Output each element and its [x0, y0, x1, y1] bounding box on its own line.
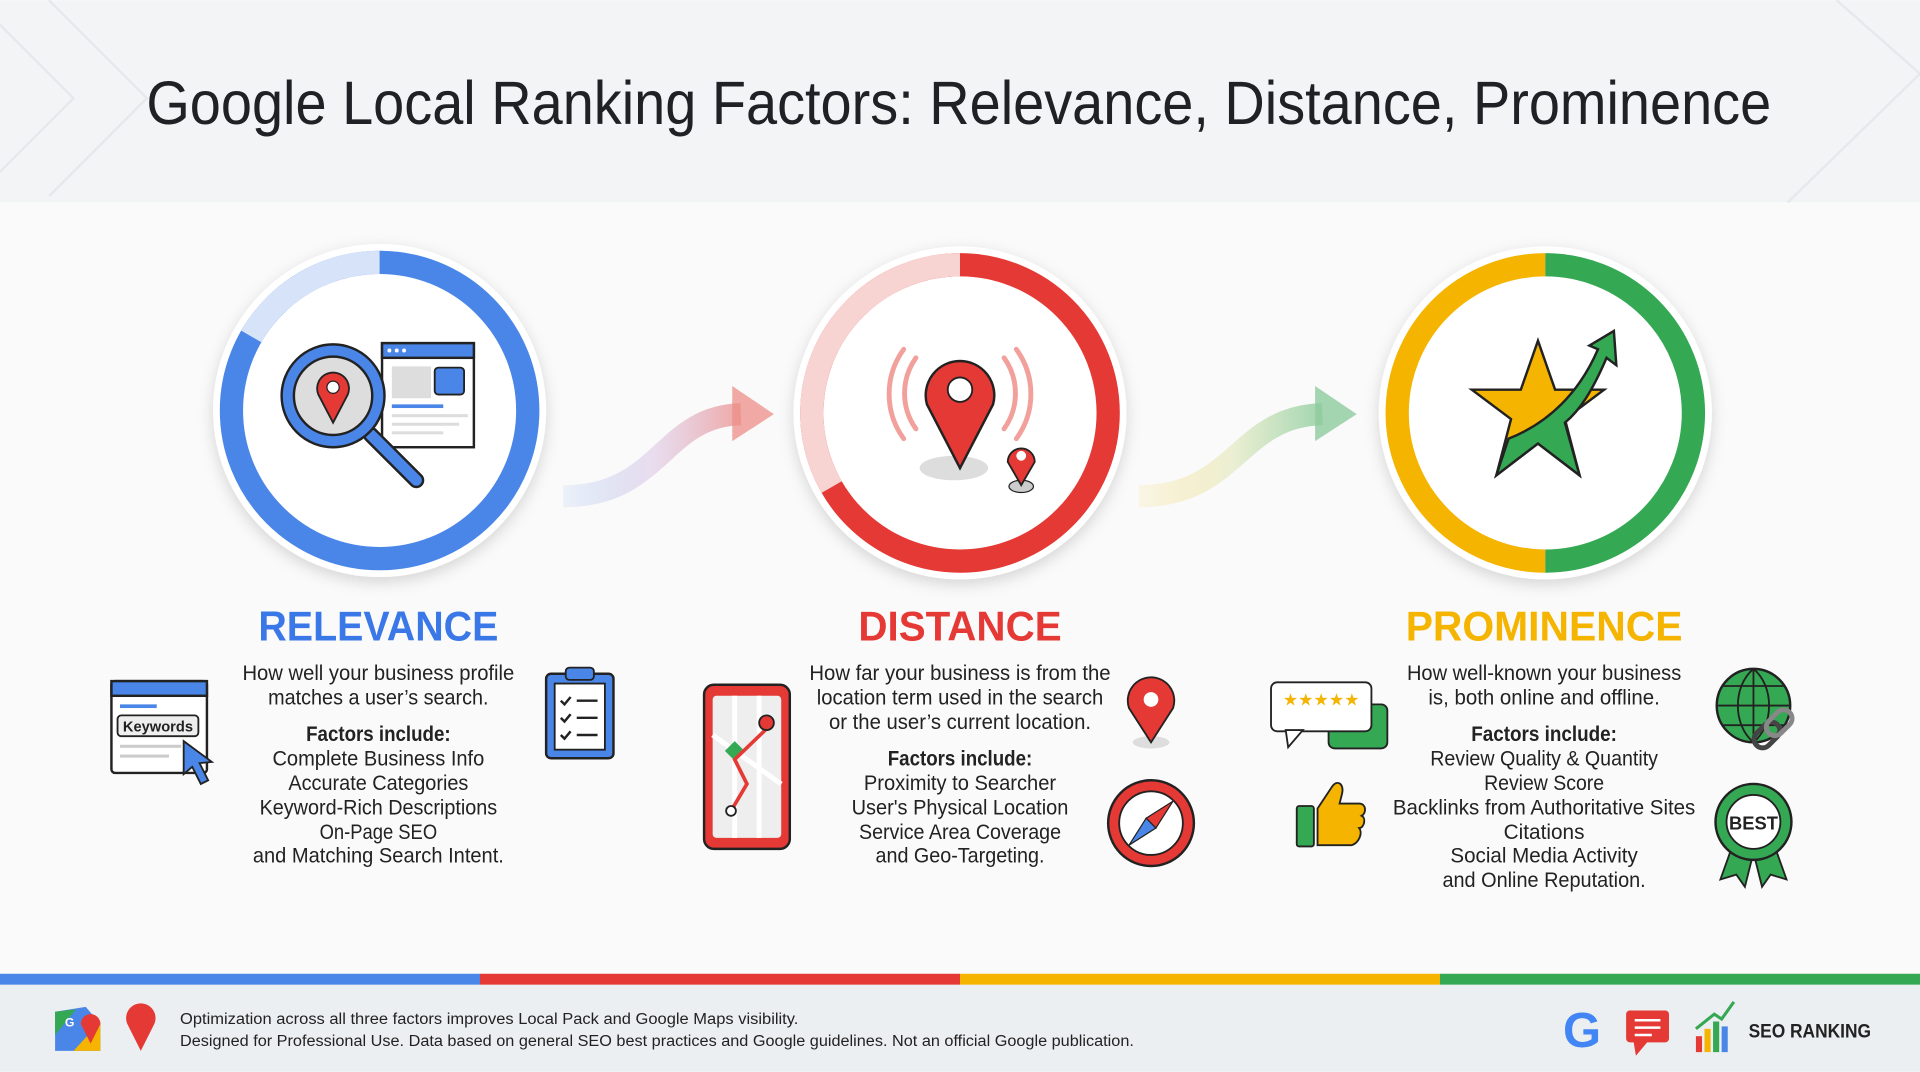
heading: prominence: PROMINENCE	[1406, 603, 1682, 650]
text: distance description: How far your business is from the	[809, 662, 1111, 685]
circle: prominence	[1379, 246, 1712, 579]
arrow: relevance to distance	[563, 386, 774, 496]
label: seo ranking: SEO RANKING	[1749, 1020, 1871, 1042]
text: prominence description: is, both online and offline.	[1428, 686, 1660, 709]
text: prominence description: Social Media Activity	[1450, 844, 1638, 867]
text: prominence description: Citations	[1504, 821, 1584, 844]
icon: phone map	[704, 685, 790, 849]
icon: footer pin	[126, 1003, 156, 1051]
icon: clipboard	[546, 668, 613, 758]
text: prominence description: Factors include:	[1471, 723, 1617, 746]
icon: google G: G	[1563, 1004, 1601, 1058]
icon: keywords browser: Keywords	[123, 719, 193, 735]
icon: maps: G	[65, 1015, 74, 1029]
text: prominence description: Review Score	[1484, 772, 1604, 795]
arrow: distance to prominence	[1139, 386, 1357, 496]
text: relevance description	[242, 662, 514, 867]
icon: best badge	[1716, 784, 1791, 887]
text: distance description: and Geo-Targeting.	[876, 844, 1044, 867]
text: prominence description: How well-known your business	[1407, 662, 1681, 685]
text: relevance description: How well your business profile	[242, 662, 514, 685]
panel: prominence	[1271, 246, 1796, 892]
heading: distance: DISTANCE	[858, 603, 1062, 650]
text: distance description: Proximity to Searcher	[864, 772, 1056, 795]
icon: star with growth arrow	[1472, 331, 1616, 475]
text: prominence description	[1393, 662, 1695, 892]
text: relevance description: Accurate Categories	[288, 772, 468, 795]
icon: best badge: BEST	[1729, 812, 1779, 833]
footer text	[180, 1011, 1134, 1050]
text: relevance description: Complete Business Info	[272, 748, 484, 771]
text: relevance description: On-Page SEO	[320, 821, 437, 844]
circle: relevance	[213, 244, 546, 577]
text: distance description: User's Physical Location	[852, 797, 1068, 820]
icon: thumbs up	[1297, 783, 1365, 846]
icon: review chat bubbles	[1271, 682, 1387, 748]
text: distance description: location term used in the search	[817, 686, 1103, 709]
text: relevance description: Factors include:	[306, 723, 451, 746]
icon: maps	[55, 1007, 100, 1051]
panel: relevance	[111, 244, 613, 867]
text: relevance description: and Matching Search Intent.	[253, 844, 504, 867]
text: prominence description: and Online Reputation.	[1442, 869, 1646, 892]
text: prominence description: Backlinks from Authoritative Sites	[1393, 797, 1695, 820]
text: distance description: Service Area Coverage	[859, 821, 1061, 844]
title: Google Local Ranking Factors: Relevance, Distance, Prominence	[146, 69, 1771, 137]
icon: pin	[1128, 677, 1174, 748]
heading: relevance: RELEVANCE	[258, 603, 498, 650]
text: prominence description: Review Quality & Quantity	[1430, 748, 1659, 771]
icon: globe with link	[1717, 669, 1796, 751]
icon: ranking chart	[1696, 1002, 1734, 1052]
text: distance description	[809, 662, 1111, 867]
text: distance description: Factors include:	[888, 748, 1032, 771]
icon: keywords browser	[111, 681, 212, 784]
header band	[0, 0, 1920, 202]
footer text: Designed for Professional Use. Data based on general SEO best practices and Google guidelines. Not an official Google publication.	[180, 1033, 1134, 1050]
panel: distance	[704, 246, 1194, 867]
circle: distance	[793, 246, 1127, 579]
icon: review chat bubbles: ★★★★★	[1283, 690, 1360, 710]
icon: magnifier with browser	[282, 343, 474, 480]
icon: compass	[1108, 780, 1194, 866]
text: relevance description: Keyword-Rich Descriptions	[260, 797, 497, 820]
text: distance description: or the user’s current location.	[829, 711, 1091, 734]
icon: location pin with signal	[889, 349, 1035, 493]
footer	[0, 985, 1920, 1072]
icon: chat	[1626, 1010, 1669, 1056]
footer text: Optimization across all three factors improves Local Pack and Google Maps visibility.	[180, 1011, 798, 1028]
text: relevance description: matches a user’s search.	[268, 686, 489, 709]
color bar	[0, 974, 1920, 985]
